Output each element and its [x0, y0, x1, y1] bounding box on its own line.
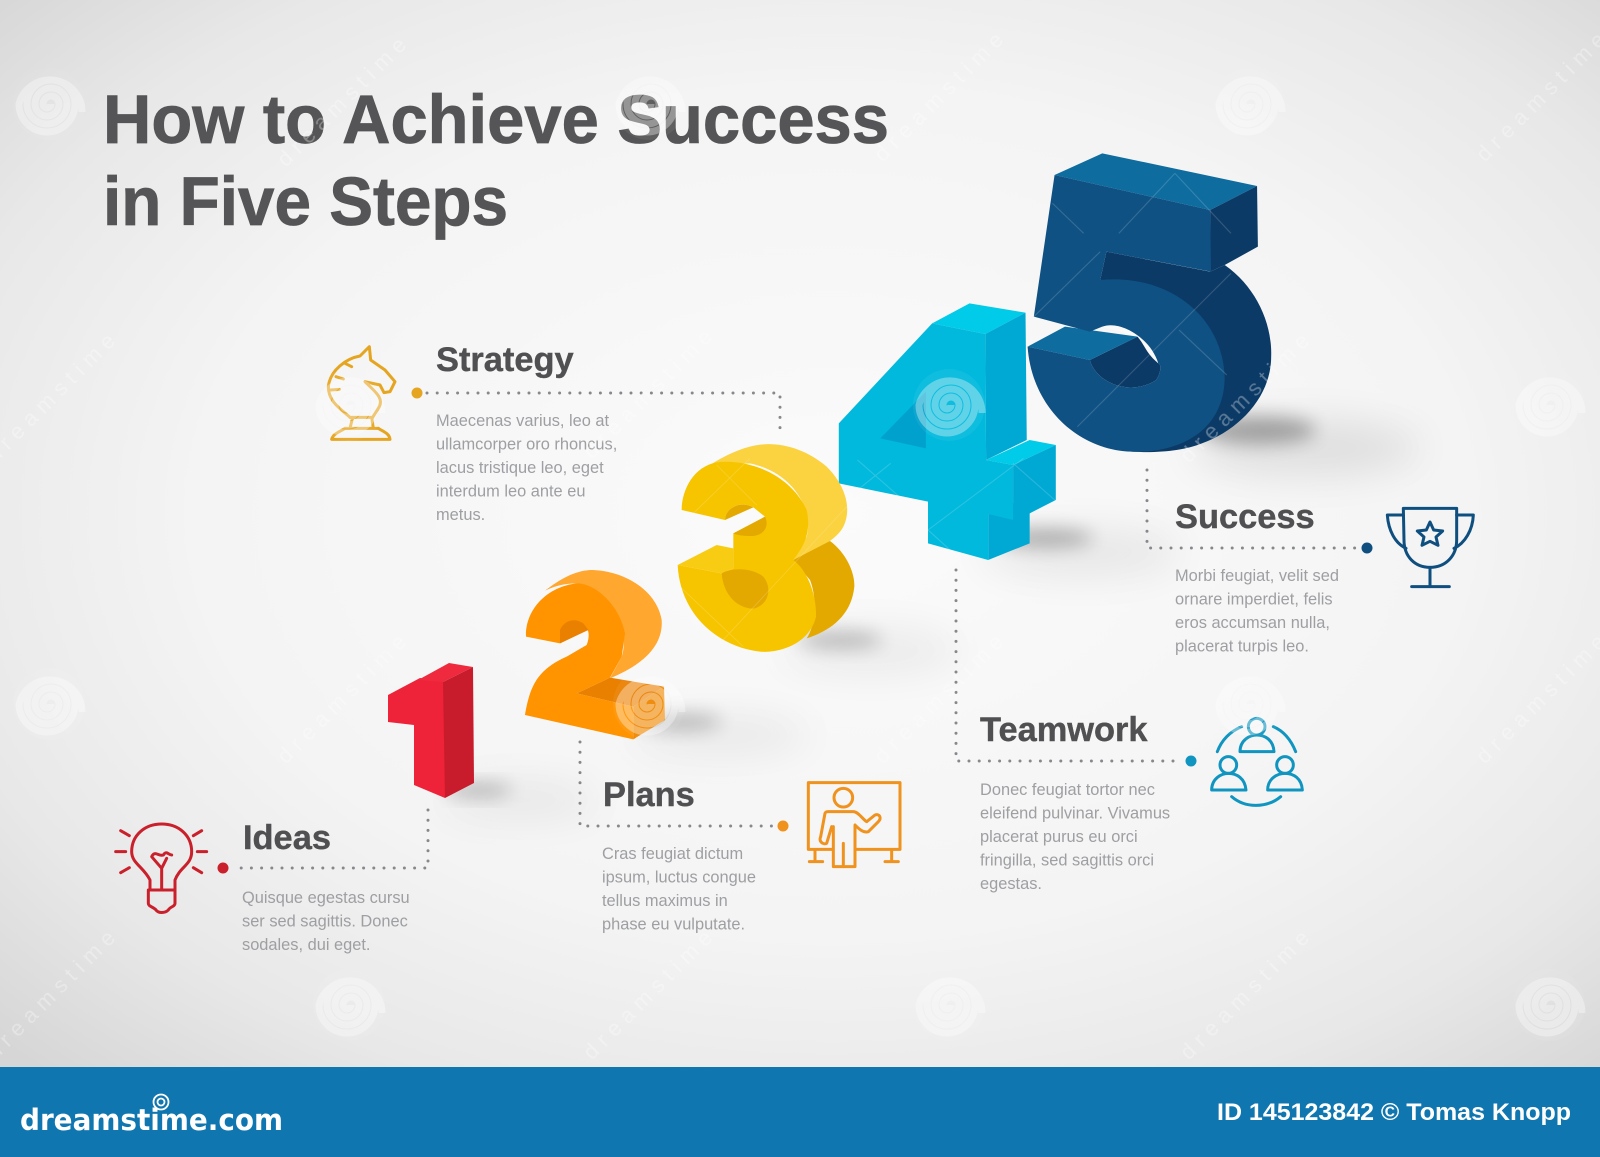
- number 3: [678, 444, 854, 652]
- marker dot: plans: [778, 820, 788, 832]
- text: ideas: Quisque egestas cursu: [242, 889, 410, 907]
- footer credit: ID 145123842 © Tomas Knopp: [1217, 1099, 1571, 1126]
- number 1: [388, 663, 474, 798]
- text: success: ornare imperdiet, felis: [1175, 590, 1333, 608]
- number 4: [839, 303, 1057, 560]
- icon: presenter at board: [808, 783, 900, 867]
- heading: plans: Plans: [603, 776, 695, 814]
- marker dot: teamwork: [1186, 756, 1196, 766]
- heading: teamwork: Teamwork: [980, 711, 1148, 749]
- heading: ideas: Ideas: [243, 819, 331, 857]
- connector: ideas: [232, 810, 428, 868]
- marker dot: strategy: [412, 388, 422, 398]
- number shadows: [440, 416, 1420, 818]
- watermark text: dreamstime: [578, 925, 717, 1065]
- text: plans: ipsum, luctus congue: [602, 868, 756, 886]
- connector: teamwork: [956, 570, 1180, 761]
- footer logo: dreamstime.com: [20, 1103, 283, 1137]
- title: How to Achieve Success: [103, 81, 889, 158]
- text: teamwork: egestas.: [980, 875, 1042, 893]
- icon: light bulb: [116, 824, 207, 912]
- icon: team: [1212, 718, 1302, 805]
- step 5: success: [1147, 470, 1473, 656]
- text: teamwork: placerat purus eu orci: [980, 828, 1138, 846]
- connector: plans: [580, 742, 773, 826]
- connector: strategy: [427, 393, 780, 430]
- text: strategy: metus.: [436, 506, 485, 524]
- text: success: placerat turpis leo.: [1175, 638, 1309, 656]
- watermark text: dreamstime: [869, 27, 1008, 167]
- text: ideas: ser sed sagittis. Donec: [242, 912, 408, 930]
- step 2: plans: [580, 742, 900, 934]
- text: teamwork: eleifend pulvinar. Vivamus: [980, 804, 1170, 822]
- title: in Five Steps: [103, 163, 508, 240]
- footer bar: [0, 1067, 1600, 1157]
- text: strategy: interdum leo ante eu: [436, 482, 585, 500]
- watermark text: dreamstime: [1175, 328, 1314, 468]
- watermark text: dreamstime: [272, 32, 411, 172]
- text: plans: tellus maximus in: [602, 892, 728, 910]
- title: [103, 81, 889, 240]
- text: plans: Cras feugiat dictum: [602, 845, 743, 863]
- marker dot: success: [1362, 542, 1372, 554]
- heading: strategy: Strategy: [436, 341, 574, 379]
- watermark text: dreamstime: [1175, 925, 1314, 1065]
- text: plans: phase eu vulputate.: [602, 916, 745, 934]
- heading: success: Success: [1175, 498, 1315, 536]
- text: teamwork: Donec feugiat tortor nec: [980, 781, 1155, 799]
- icon: chess knight: [328, 347, 395, 439]
- connector: success: [1147, 470, 1357, 548]
- footer logo spiral: [154, 1094, 168, 1110]
- text: ideas: sodales, dui eget.: [242, 936, 370, 954]
- icon: trophy: [1387, 508, 1473, 587]
- text: success: Morbi feugiat, velit sed: [1175, 567, 1339, 585]
- text: teamwork: fringilla, sed sagittis orci: [980, 852, 1154, 870]
- text: strategy: lacus tristique leo, eget: [436, 459, 604, 477]
- number 2: [525, 570, 665, 739]
- watermark text: dreamstime: [272, 629, 411, 769]
- marker dot: ideas: [218, 862, 228, 874]
- text: success: eros accumsan nulla,: [1175, 614, 1330, 632]
- watermark text: dreamstime: [578, 324, 717, 464]
- watermark text: dreamstime: [869, 629, 1008, 769]
- step 3: strategy: [328, 341, 780, 524]
- text: strategy: Maecenas varius, leo at: [436, 412, 610, 430]
- step 4: teamwork: [956, 570, 1302, 893]
- step 1: ideas: [116, 810, 428, 954]
- text: strategy: ullamcorper oro rhoncus,: [436, 436, 617, 454]
- number 5: [1028, 153, 1271, 452]
